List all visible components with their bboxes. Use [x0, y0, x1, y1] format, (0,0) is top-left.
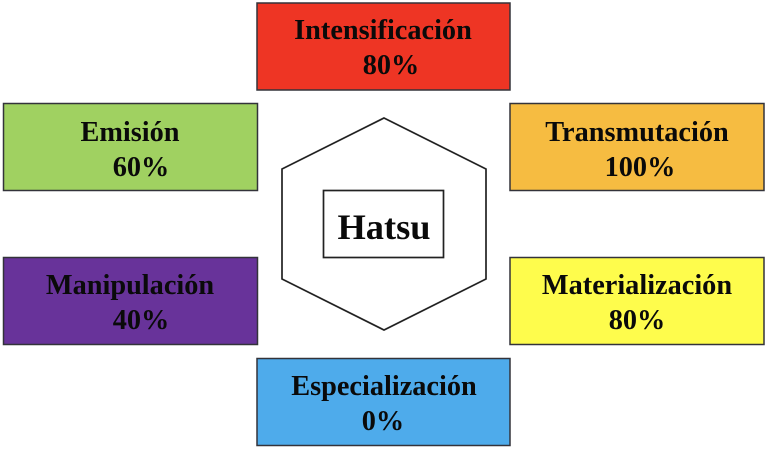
panel: Emisión: 60%	[113, 152, 169, 183]
panel: Manipulación: Manipulación	[46, 270, 214, 301]
panel: Materialización	[510, 258, 764, 344]
panel: Emisión: Emisión	[80, 117, 180, 148]
panel: Especialización	[257, 358, 510, 446]
panel: Transmutación	[510, 104, 764, 190]
panel: Intensificación: 80%	[363, 50, 419, 81]
center label: Hatsu	[324, 190, 444, 258]
hexagon	[282, 118, 486, 330]
panel: Manipulación: 40%	[113, 305, 169, 336]
panel: Materialización: Materialización	[542, 270, 732, 301]
panel: Transmutación: Transmutación	[545, 117, 729, 148]
panel: Manipulación	[4, 258, 258, 344]
panel: Intensificación: Intensificación	[294, 15, 472, 46]
center label: Hatsu: Hatsu	[337, 207, 431, 247]
panel: Transmutación: 100%	[605, 152, 675, 183]
panel: Materialización: 80%	[609, 305, 665, 336]
panel: Especialización: Especialización	[291, 371, 477, 402]
panel: Especialización: 0%	[362, 406, 404, 437]
panel: Intensificación	[257, 3, 510, 90]
panel: Emisión	[4, 104, 258, 190]
